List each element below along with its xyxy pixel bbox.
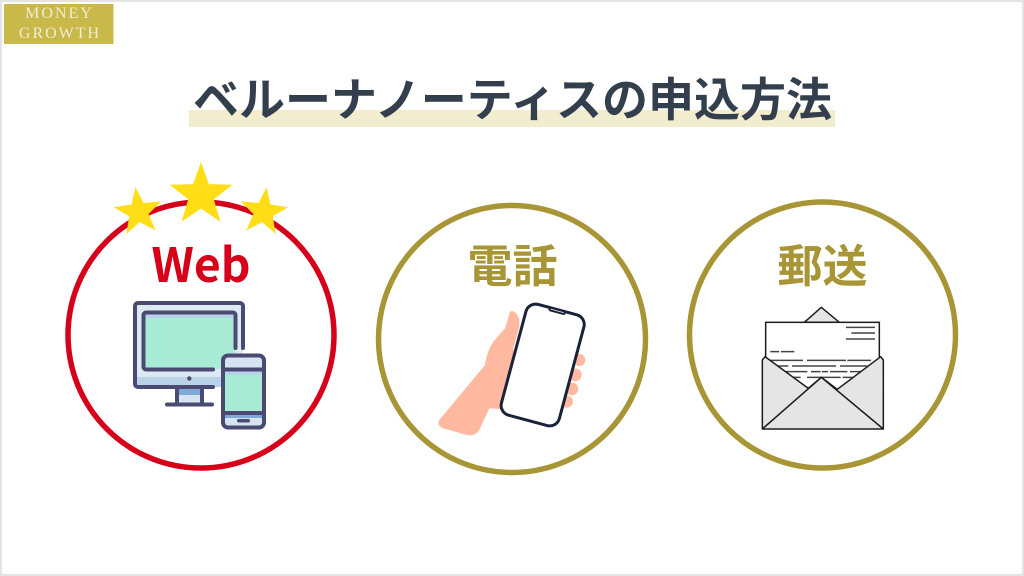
logo: Money Growth: MONEY [25, 5, 94, 22]
logo: Money Growth: GROWTH [19, 25, 101, 42]
heading: Web: Web [152, 227, 250, 296]
icon: open envelope with letter [762, 307, 883, 429]
panel: mail [690, 202, 956, 468]
logo: Money Growth [4, 4, 114, 44]
heading: 電話: 電話 [467, 230, 558, 295]
panel: telephone [378, 206, 646, 472]
panel: Web [68, 162, 334, 468]
icon: hand holding smartphone [438, 302, 586, 435]
icon: desktop monitor and smartphone [135, 303, 264, 428]
heading: 郵送: 郵送 [777, 230, 868, 295]
title with highlight: ベルーナノーティスの申込方法 [193, 64, 832, 130]
icon: three stars [112, 162, 290, 235]
